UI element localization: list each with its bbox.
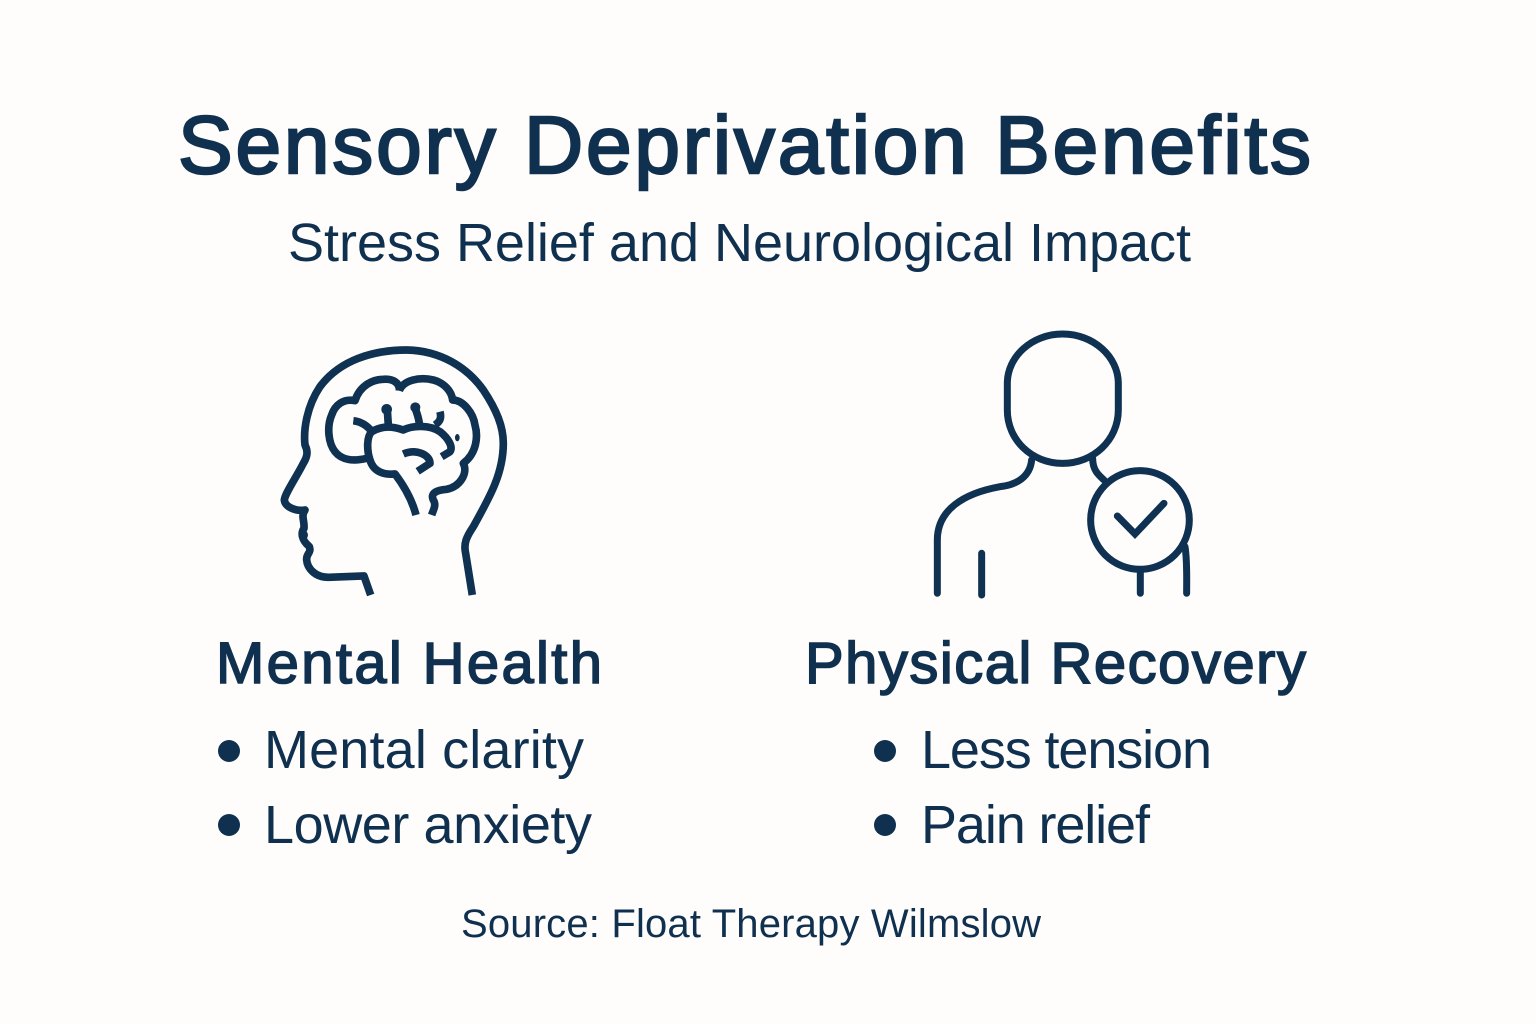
heading: Physical Recovery: Physical Recovery <box>805 631 1306 696</box>
list: mental health benefits: Mental clarity <box>264 720 584 780</box>
source note: Source: Float Therapy Wilmslow <box>461 902 1041 946</box>
list: physical recovery benefits: Pain relief <box>921 795 1151 855</box>
icon: person with checkmark <box>937 334 1189 595</box>
title: Sensory Deprivation Benefits <box>178 100 1311 191</box>
list: physical recovery benefits <box>874 720 1212 855</box>
heading: Mental Health: Mental Health <box>216 631 602 696</box>
icon: head with brain <box>284 350 503 595</box>
subtitle: Stress Relief and Neurological Impact <box>288 213 1191 273</box>
list: physical recovery benefits: Less tension <box>921 720 1212 780</box>
list: mental health benefits: Lower anxiety <box>264 795 592 855</box>
list: mental health benefits <box>218 720 592 855</box>
